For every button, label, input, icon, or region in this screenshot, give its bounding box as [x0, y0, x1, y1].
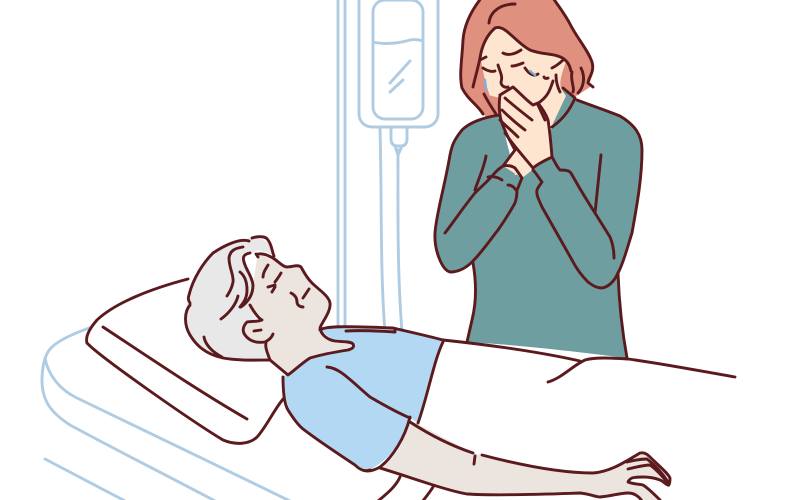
- IV drip stand: [338, 0, 438, 332]
- patient face and neck: [243, 253, 354, 375]
- pillow: [87, 270, 300, 443]
- woman pink lip shadow: [484, 94, 500, 116]
- woman hands: [500, 87, 552, 178]
- woman: [435, 0, 642, 358]
- patient outlines: [186, 237, 670, 500]
- legs of bed frame lines: [377, 477, 433, 500]
- woman hair: [461, 0, 593, 117]
- blanket: [418, 340, 735, 500]
- man patient: [185, 237, 670, 500]
- woman outlines: [435, 0, 642, 358]
- patient arm: [380, 420, 670, 500]
- patient hair: [185, 238, 273, 360]
- patient shirt: [283, 326, 443, 471]
- woman face: [481, 27, 566, 125]
- tears: [485, 71, 535, 90]
- woman body sweater: [435, 88, 642, 358]
- bed mattress: [42, 327, 292, 500]
